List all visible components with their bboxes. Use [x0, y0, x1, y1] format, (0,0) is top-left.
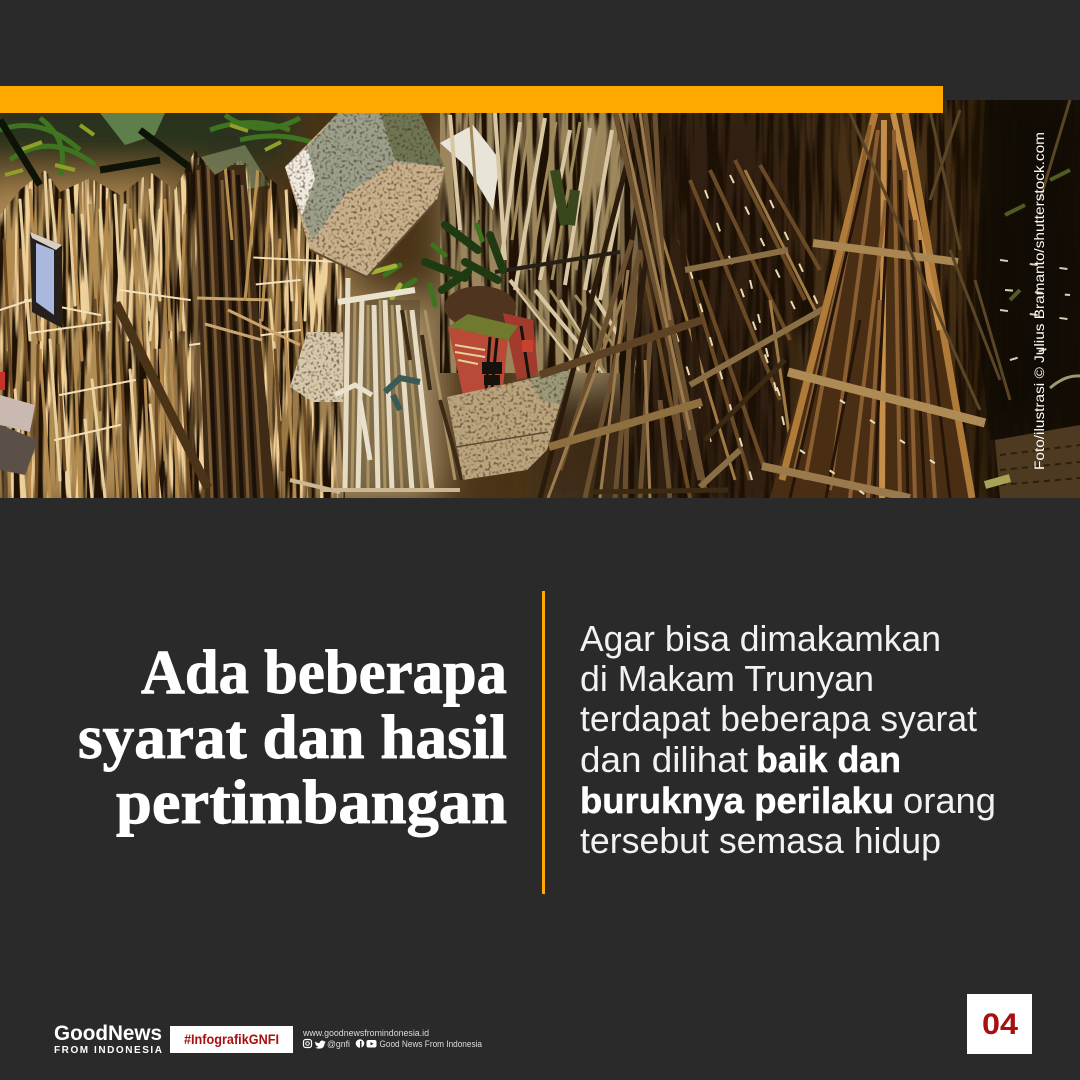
photo: bamboo graves at Trunyan	[0, 90, 1080, 510]
bamboo cone one	[540, 113, 830, 498]
body text: buruknya perilaku	[580, 780, 894, 821]
icon: twitter	[315, 1040, 326, 1049]
footer links and social icons: @gnfi	[327, 1039, 350, 1049]
heading: pertimbangan	[116, 769, 507, 837]
footer logo: GoodNews From Indonesia: GoodNews	[54, 1022, 162, 1045]
large woven basket	[447, 370, 572, 482]
green leaves	[373, 225, 503, 305]
heading	[78, 639, 507, 837]
page number box	[967, 994, 1032, 1054]
body text: orang	[903, 780, 996, 821]
body text: Agar bisa dimakamkan	[580, 618, 941, 659]
bamboo fence left	[0, 150, 345, 498]
hashtag tag: #InfografikGNFI	[184, 1032, 279, 1047]
orange accent bar	[0, 86, 943, 113]
dark foliage right	[850, 100, 1080, 498]
bamboo bundle centre	[290, 278, 462, 492]
small woven basket	[290, 332, 345, 404]
photo credit: Foto/ilustrasi © Julius Bramanto/shutterstock.com	[1031, 132, 1047, 470]
footer links and social icons: Good News From Indonesia	[380, 1039, 482, 1049]
foliage top left	[0, 113, 320, 195]
body text: tersebut semasa hidup	[580, 820, 941, 861]
heading: Ada beberapa	[141, 639, 507, 707]
icon: instagram	[304, 1040, 312, 1048]
body text: terdapat beberapa syarat	[580, 698, 977, 739]
body text: baik dan	[756, 739, 901, 780]
vertical divider	[542, 591, 545, 894]
body text: dan dilihat	[580, 739, 748, 780]
icon: youtube	[366, 1040, 376, 1048]
footer logo: GoodNews From Indonesia	[54, 1022, 162, 1056]
hashtag tag	[170, 1026, 293, 1053]
body text: di Makam Trunyan	[580, 658, 874, 699]
footer logo: GoodNews From Indonesia: FROM INDONESIA	[54, 1045, 162, 1056]
bamboo cone two	[762, 113, 985, 498]
straw thicket centre	[440, 113, 640, 400]
footer links and social icons	[302, 1028, 482, 1049]
picture frame	[30, 232, 62, 328]
footer links and social icons: www.goodnewsfromindonesia.id	[302, 1028, 429, 1038]
icon: facebook	[356, 1039, 364, 1048]
hanging woven basket top	[285, 113, 445, 278]
heading: syarat dan hasil	[78, 704, 507, 772]
photo base tones	[0, 90, 1080, 510]
patterned red box	[448, 313, 538, 395]
dark bamboo bundle	[195, 165, 300, 498]
diagonal brown stake	[116, 303, 208, 488]
lower left bamboo cone and dark lattice	[620, 100, 1000, 498]
left rubbish pile	[0, 372, 38, 475]
body text	[580, 618, 996, 861]
dark round basket	[444, 286, 516, 322]
page number box: 04	[982, 1008, 1018, 1041]
